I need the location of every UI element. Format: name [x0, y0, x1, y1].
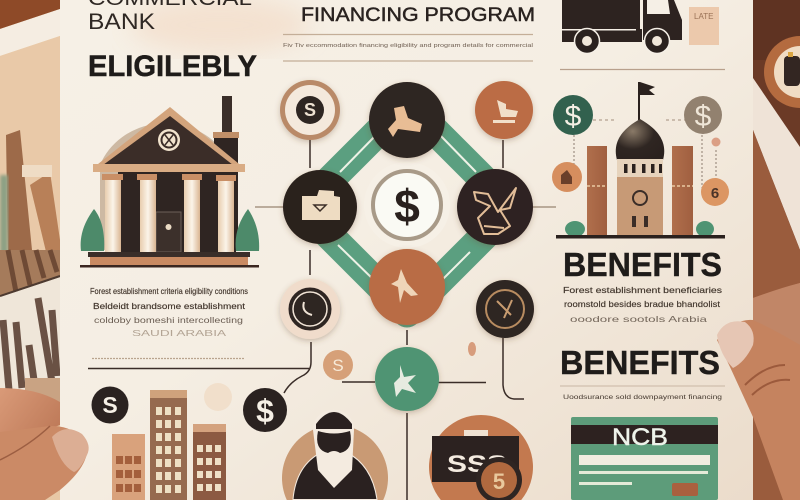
divider — [560, 385, 725, 387]
node: dark S: S — [102, 392, 118, 418]
left hand — [0, 388, 89, 500]
small caption: Uoodsurance sold downpayment financing — [563, 394, 722, 401]
eligibility text block: coldoby bomeshi intercollecting — [94, 315, 243, 325]
benefits text block: ooodore sootols Arabia — [570, 314, 707, 324]
heading: benefits upper: BENEFITS — [563, 246, 722, 283]
icon: cash and coin: SSS — [447, 451, 507, 478]
green ring — [302, 103, 512, 313]
node: dark S — [92, 386, 128, 424]
node: faded coin — [204, 383, 232, 411]
right hand — [717, 283, 800, 500]
benefits text block: Forest establishment beneficiaries — [563, 285, 722, 295]
node: top left: S — [304, 100, 316, 120]
eligibility text block: SAUDI ARABIA — [132, 328, 227, 338]
node: small coin — [323, 350, 353, 380]
node: top right — [475, 81, 533, 139]
benefit icons around tower: $ — [695, 100, 712, 133]
eligibility text block — [90, 286, 248, 338]
benefits text block: roomstold besides bradue bhandolist — [564, 299, 721, 309]
center node: dollar — [364, 162, 450, 248]
connector lines — [88, 138, 556, 500]
bottom city buildings — [112, 390, 226, 500]
heading: commercial bank: BANK — [88, 9, 155, 34]
node: top left — [280, 80, 340, 140]
NCB card — [571, 417, 718, 500]
small accent mark — [468, 342, 476, 356]
eligibility divider — [92, 358, 245, 360]
node: top center — [369, 82, 445, 158]
coin on table — [764, 36, 800, 108]
program description rules and text: Fiv Tiv eccommodation financing eligibility and program details for commercial — [283, 43, 533, 49]
benefit icons around tower: 6 — [711, 185, 719, 202]
eligibility text block: Forest establishment criteria eligibility conditions — [90, 286, 248, 296]
NCB card: NCB — [612, 424, 668, 451]
icon: tower with dome — [556, 82, 725, 238]
eligibility text block: Beldeidt brandsome establishment — [93, 301, 246, 311]
node: left folder — [283, 170, 357, 244]
heading: eligibility: ELIGILEBLY — [88, 50, 257, 83]
icon: cash and coin: 5 — [493, 469, 505, 494]
node: lower left ring — [280, 279, 340, 339]
node: dark dollar: $ — [256, 393, 274, 429]
benefit icons around tower — [552, 95, 729, 206]
icon: bank building — [80, 96, 259, 268]
node: bottom center — [369, 249, 445, 325]
node: dark gold ring — [476, 280, 534, 338]
heading: benefits lower: BENEFITS — [560, 344, 720, 381]
benefit icons around tower: $ — [565, 100, 582, 133]
node: dark dollar — [243, 388, 287, 432]
soft peach glow — [130, 0, 310, 53]
node: small coin: S — [332, 356, 344, 375]
icon: cash and coin — [429, 415, 533, 500]
icon: delivery truck: LATE — [694, 12, 713, 21]
program description rules and text — [283, 34, 533, 61]
heading: commercial bank — [88, 0, 252, 34]
center node: dollar: $ — [394, 180, 420, 232]
left background photo — [0, 0, 62, 500]
ring dashes — [338, 133, 476, 284]
heading: financing program: FINANCING PROGRAM — [301, 5, 535, 26]
divider — [560, 68, 725, 70]
node: green — [375, 347, 439, 411]
node: right line art — [457, 169, 533, 245]
benefits text block — [563, 285, 722, 324]
right background: wood table and paper — [750, 0, 800, 500]
icon: person — [282, 410, 388, 500]
icon: delivery truck — [562, 0, 719, 54]
